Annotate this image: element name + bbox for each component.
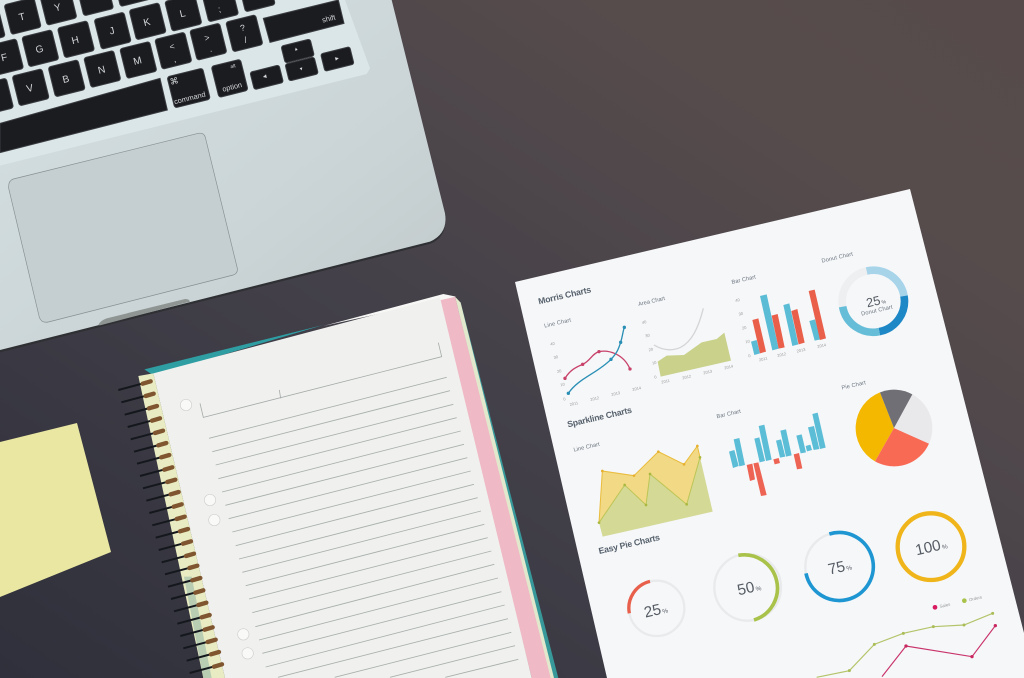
area axis labels: 2014: [724, 363, 734, 370]
positive bars: [729, 413, 826, 468]
key legends: T: [18, 11, 26, 24]
label: Donut Chart: Donut Chart: [821, 251, 854, 265]
down arrow key: [285, 57, 318, 81]
easy pie 75 percent: [805, 533, 873, 601]
heading: Sparkline Charts: Sparkline Charts: [566, 405, 633, 429]
label: sparkline Bar Chart: Bar Chart: [716, 409, 742, 420]
bottom line chart: [817, 594, 997, 677]
bar axis labels: 20: [741, 325, 748, 331]
track ring: [805, 533, 873, 601]
printed chart sheet: [515, 189, 1024, 678]
key legends: V: [25, 83, 35, 95]
green area: [658, 333, 731, 377]
yellow points: [601, 445, 699, 477]
yellow outline: [599, 446, 701, 523]
area axis labels: 20: [648, 346, 654, 352]
area axis labels: 0: [654, 374, 658, 380]
header box: [200, 343, 442, 417]
bar axis labels: 2014: [817, 342, 827, 349]
home row of keys: [0, 0, 275, 76]
yellow ring: [898, 513, 964, 580]
grey curve: [654, 308, 703, 350]
key legends: command: [173, 90, 206, 106]
pie chart: [856, 390, 932, 466]
shift key: [263, 0, 344, 42]
line axis labels: 30: [553, 354, 559, 360]
key legends: ◀: [262, 73, 267, 79]
bar axis labels: 2012: [777, 351, 787, 358]
key legends: Y: [53, 2, 63, 14]
value 75: 75%: [826, 557, 854, 579]
line axis labels: 0: [563, 396, 567, 402]
bar axis labels: 40: [735, 297, 741, 303]
label: Bar Chart: Bar Chart: [731, 274, 757, 286]
green series: [817, 613, 993, 677]
line axis labels: 10: [560, 381, 566, 387]
black spiral wires: [118, 383, 215, 673]
option key: [211, 59, 248, 97]
line axis labels: 40: [550, 341, 556, 347]
key legends: J: [108, 26, 116, 38]
value 25: 25%: [642, 600, 670, 622]
keys: [0, 0, 354, 153]
laptop shadow edge: [0, 213, 446, 352]
green arc: [738, 555, 777, 620]
page: [153, 297, 532, 678]
bar axis labels: 0: [748, 353, 752, 358]
line chart: [544, 318, 642, 407]
punched holes: [180, 399, 253, 659]
label: Line Chart: Line Chart: [544, 318, 572, 330]
bar axis labels: 10: [745, 338, 751, 344]
red arc: [629, 581, 650, 613]
top row of keys: [0, 0, 150, 44]
area axis labels: 30: [645, 332, 651, 338]
line axis labels: 2014: [632, 385, 642, 392]
red slice: [875, 428, 929, 466]
red line series: [565, 351, 630, 378]
binding strip: [138, 373, 225, 678]
bar axis labels: 30: [738, 311, 744, 317]
value 100: 100%: [914, 535, 949, 559]
key legends: shift: [321, 13, 336, 25]
lower green cover strip: [184, 577, 212, 678]
line axis labels: [550, 341, 642, 407]
teal back cover: [144, 325, 323, 375]
bar axis labels: 2013: [796, 347, 807, 354]
label: Area Chart: Area Chart: [638, 296, 666, 308]
blue line series: [568, 327, 624, 393]
trackpad: [9, 133, 237, 322]
key legends: ;: [217, 4, 222, 14]
area axis labels: 2012: [682, 373, 692, 380]
legend: [933, 594, 982, 610]
key legends: >: [203, 32, 211, 43]
notebook: [118, 294, 558, 678]
teal right edge: [457, 303, 558, 678]
area axis labels: 40: [641, 319, 648, 325]
key legends: M: [132, 55, 143, 68]
key legends: ⌘: [169, 75, 180, 87]
sparkline bar chart: [729, 413, 826, 496]
laptop body: [0, 0, 446, 350]
line points: [563, 350, 632, 380]
donut value: 25%: [865, 292, 888, 310]
key legends: ▼: [298, 66, 304, 72]
donut segments: [842, 270, 904, 332]
pink series: [882, 626, 995, 677]
pink divider tab: [438, 297, 551, 678]
command key: [167, 68, 210, 108]
green points: [848, 612, 994, 672]
sticky note: [0, 423, 111, 597]
key legends: ▲: [293, 46, 299, 52]
blue bars: [751, 294, 821, 355]
bar axis labels: 2011: [758, 355, 769, 362]
bottom letter row of keys: [0, 15, 263, 115]
lower section of sheet: [566, 390, 997, 677]
keyboard well: [0, 0, 370, 166]
left arrow key: [250, 65, 283, 90]
sparkline area chart: [573, 442, 713, 537]
green outline: [599, 457, 700, 523]
pink points: [904, 624, 997, 658]
area chart: [638, 296, 734, 385]
key legends: N: [97, 64, 107, 77]
right arrow key: [321, 47, 354, 71]
key legends: alt: [230, 63, 237, 70]
dark slice: [880, 390, 912, 428]
line axis labels: 20: [556, 368, 563, 374]
key legends: /: [243, 34, 249, 45]
donut caption: Donut Chart: [861, 304, 894, 318]
blue points: [567, 326, 626, 395]
heading: Easy Pie Charts: Easy Pie Charts: [598, 532, 661, 556]
donut chart: [821, 251, 904, 332]
blue arc: [806, 533, 873, 601]
area axis labels: 10: [651, 360, 658, 366]
key legends: .: [208, 44, 213, 54]
cream divider: [455, 297, 554, 678]
laptop: [0, 0, 446, 352]
key legends: H: [71, 35, 80, 47]
line axis labels: 2012: [590, 395, 600, 402]
key legends: option: [221, 80, 243, 94]
area axis labels: [641, 319, 734, 385]
top sheet edge: [323, 294, 456, 326]
trackpad notch: [98, 299, 190, 325]
area axis labels: 2011: [661, 378, 671, 385]
track ring: [714, 554, 781, 621]
up arrow key: [281, 39, 314, 63]
easy pie 50 percent: [714, 554, 781, 621]
value 50: 50%: [736, 577, 763, 599]
green area: [599, 457, 713, 537]
legend: Orders: Orders: [968, 594, 982, 602]
key legends: <: [168, 41, 176, 52]
label: Pie Chart: Pie Chart: [841, 380, 867, 392]
space bar: [0, 78, 167, 153]
key legends: G: [35, 44, 45, 56]
yellow slice: [856, 392, 894, 461]
green points: [598, 456, 701, 524]
negative bars: [747, 453, 802, 496]
key legends: [0, 2, 340, 106]
brown spiral rings: [143, 381, 222, 667]
line axis labels: 2011: [569, 400, 579, 407]
key legends: ?: [239, 22, 246, 33]
key legends: K: [142, 17, 152, 29]
key legends: ▶: [335, 55, 340, 61]
label: sparkline Line Chart: Line Chart: [573, 442, 601, 454]
yellow area: [599, 446, 701, 523]
area axis labels: 2013: [703, 368, 713, 375]
key legends: ,: [172, 54, 177, 64]
easy pie 100 percent: [898, 513, 964, 580]
track ring: [629, 581, 684, 636]
bar axis labels: [735, 297, 827, 362]
key legends: B: [61, 74, 71, 86]
key legends: L: [179, 8, 187, 20]
bar chart: [731, 274, 827, 362]
line axis labels: 2013: [611, 390, 621, 397]
red bars: [752, 290, 826, 353]
light slice: [894, 394, 932, 444]
ruled lines: [209, 377, 518, 677]
key legends: F: [0, 52, 9, 64]
heading: Morris Charts: Morris Charts: [537, 284, 592, 306]
legend: Sales: Sales: [939, 602, 951, 609]
upper section of sheet: [537, 251, 904, 420]
easy pie 25 percent: [629, 581, 684, 636]
